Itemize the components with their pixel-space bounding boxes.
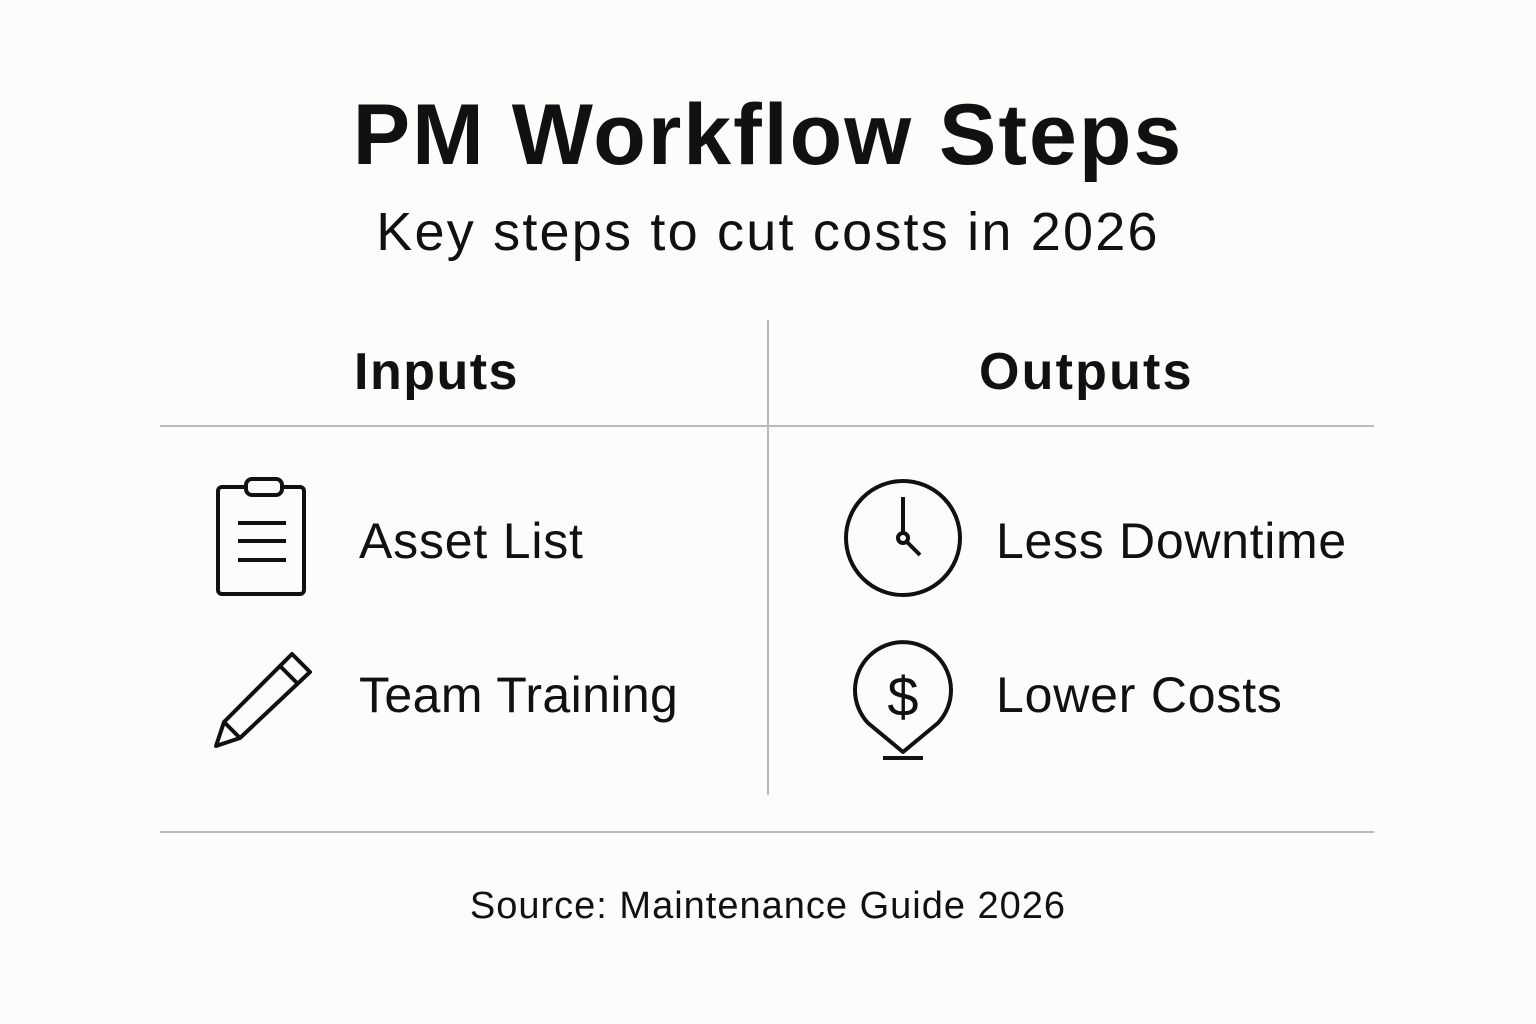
heading: inputs: Inputs	[354, 343, 519, 401]
subtitle: Key steps to cut costs in 2026	[376, 202, 1160, 262]
heading: outputs: Outputs	[979, 343, 1194, 401]
text: asset list: Asset List	[359, 513, 584, 569]
icon: pencil	[214, 652, 312, 748]
source: Source: Maintenance Guide 2026	[470, 885, 1066, 927]
icon: dollar pin: $	[887, 665, 919, 728]
text: lower costs: Lower Costs	[996, 667, 1283, 723]
icon: dollar pin	[853, 640, 953, 760]
text: less downtime: Less Downtime	[996, 513, 1347, 569]
text: team training: Team Training	[359, 667, 678, 723]
icon: clock	[844, 479, 962, 597]
icon: clipboard	[216, 477, 306, 596]
title: PM Workflow Steps	[353, 87, 1183, 183]
